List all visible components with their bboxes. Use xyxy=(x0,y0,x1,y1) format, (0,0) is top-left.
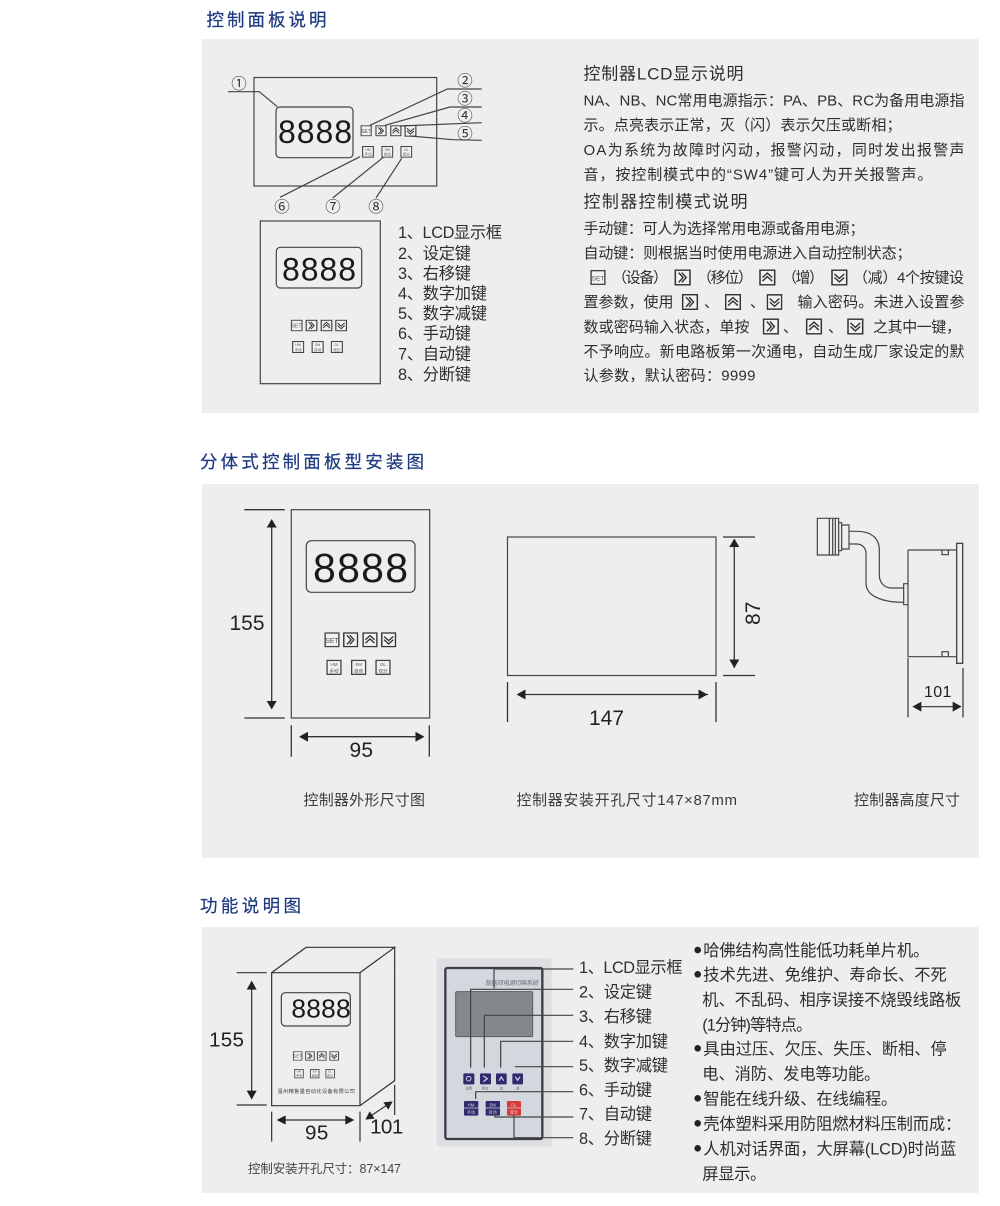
keys: DL xyxy=(328,1070,332,1074)
device casing xyxy=(437,958,552,1147)
keys: 自动 xyxy=(312,1073,318,1078)
device title: 智能双电源切换系统 xyxy=(485,979,540,987)
front plate xyxy=(957,543,963,663)
key legend list: 1、LCD显示框 xyxy=(398,224,502,242)
LCD screen xyxy=(456,992,533,1037)
text block: control mode description: 、 xyxy=(750,294,765,311)
photo key legend xyxy=(579,959,682,1148)
keys: lower row: 双分 xyxy=(403,152,410,157)
text block: LCD description: OA为系统为故障时闪动，报警闪动，同时发出报警声 xyxy=(584,141,964,159)
navy keys: DL xyxy=(511,1103,517,1108)
dimension: width 95: 95 xyxy=(350,739,373,762)
text block: control mode description: 之其中一键， xyxy=(873,319,961,336)
navy keys: 减 xyxy=(516,1085,520,1090)
navy keys: 加 xyxy=(500,1085,504,1090)
feature list: 具由过压、欠压、失压、断相、停 xyxy=(703,1040,947,1058)
text block: control mode description: SET xyxy=(592,276,604,282)
feature list: 电、消防、发电等功能。 xyxy=(702,1065,880,1083)
diagram: vertical panel: 8888 xyxy=(282,252,356,288)
keys xyxy=(325,633,396,674)
feature list: (1分钟)等特点。 xyxy=(702,1016,812,1034)
key legend list: 6、手动键 xyxy=(398,325,471,343)
dark frame xyxy=(445,968,542,1139)
text block: LCD description: NA、NB、NC常用电源指示：PA、PB、RC为备用电源指 xyxy=(584,92,964,110)
keys: 手动 xyxy=(329,668,339,674)
callout numbers: ⑧ xyxy=(368,198,384,216)
callout numbers: ③ xyxy=(457,90,473,108)
dimension: 101: 101 xyxy=(370,1116,403,1139)
key legend list: 5、数字减键 xyxy=(398,305,487,323)
navy keys: HM xyxy=(468,1103,475,1108)
diagram: vertical panel: DL xyxy=(334,343,339,347)
diagram: vertical panel: 自动 xyxy=(314,347,322,352)
dimension: depth 101: 101 xyxy=(924,684,951,701)
dimension: 95: 95 xyxy=(305,1121,328,1144)
text block: control mode description: 输入密码。未进入设置参 xyxy=(798,294,964,311)
text block: LCD description xyxy=(584,64,964,184)
feature list: 智能在线升级、在线编程。 xyxy=(703,1090,897,1108)
text block: control mode description: 置参数，使用 xyxy=(584,294,674,311)
feature list: 人机对话界面，大屏幕(LCD)时尚蓝 xyxy=(703,1140,956,1158)
keys: upper row xyxy=(361,125,416,136)
key legend list xyxy=(398,224,502,384)
keys: SM xyxy=(312,1070,317,1074)
diagram: product photo with labelled keys xyxy=(437,958,573,1147)
photo key legend: 1、LCD显示框 xyxy=(579,959,682,977)
key legend list: 7、自动键 xyxy=(398,346,471,364)
text block: control mode description: 不予响应。新电路板第一次通电，自动生成厂家设定的默 xyxy=(584,342,964,360)
dimension: width 95 xyxy=(291,725,429,762)
photo key legend: 8、分断键 xyxy=(579,1130,652,1148)
panel: installation drawings xyxy=(202,484,979,858)
feature list: 屏显示。 xyxy=(702,1165,766,1183)
keys: DL xyxy=(380,662,386,667)
keys: lower row: 手动 xyxy=(364,152,372,157)
photo key legend: 2、设定键 xyxy=(579,984,652,1002)
dimension: 101 xyxy=(365,1085,403,1139)
text block: control mode description: 认参数，默认密码：9999 xyxy=(584,368,756,384)
photo key legend: 3、右移键 xyxy=(579,1008,652,1026)
photo key legend: 6、手动键 xyxy=(579,1082,652,1100)
feature list xyxy=(694,942,961,1183)
diagram: vertical panel: 手动 xyxy=(295,347,302,352)
keys: SET xyxy=(293,1054,302,1059)
connector xyxy=(817,518,849,555)
caption: cutout dimensions: 控制安装开孔尺寸：87×147 xyxy=(248,1161,401,1176)
caption: outline size: 控制器外形尺寸图 xyxy=(304,792,425,809)
diagram: vertical panel: 双分 xyxy=(333,347,341,352)
text block: control mode description: 、 xyxy=(828,319,843,336)
dimension label: 147: 147 xyxy=(589,707,624,730)
leader lines xyxy=(228,89,482,198)
diagram: vertical panel: HM xyxy=(295,343,301,347)
leader lines xyxy=(471,969,573,1138)
text block: control mode description xyxy=(584,192,964,384)
navy keys: 双分 xyxy=(510,1109,518,1115)
LCD display frame xyxy=(276,107,353,158)
keys: lower row: DL xyxy=(404,148,409,152)
text block: control mode description: （增） xyxy=(782,270,824,286)
panel: control panel description xyxy=(202,39,979,413)
navy keys xyxy=(463,1073,523,1116)
callout numbers: ⑥ xyxy=(274,198,290,216)
keys: 双分 xyxy=(327,1073,333,1078)
navy keys: 手动 xyxy=(467,1109,475,1115)
text block: LCD description: 控制器LCD显示说明 xyxy=(584,64,744,84)
diagram: vertical panel xyxy=(260,221,380,384)
text block: control mode description: 、 xyxy=(783,319,798,336)
keys: lower row: HM xyxy=(365,148,371,152)
key legend list: 8、分断键 xyxy=(398,366,471,384)
key legend list: 4、数字加键 xyxy=(398,285,487,303)
caption: cutout size: 控制器安装开孔尺寸147×87mm xyxy=(516,792,737,809)
keys: 手动 xyxy=(296,1073,302,1078)
text block: control mode description: （移位） xyxy=(697,270,753,286)
photo key legend: 5、数字减键 xyxy=(579,1057,668,1075)
dimension: height 155: 155 xyxy=(230,612,264,635)
diagram: labelled panel front xyxy=(228,72,482,216)
diagram: vertical panel: SM xyxy=(315,343,320,347)
keys: lower row: 自动 xyxy=(384,152,391,157)
feature list: 技术先进、免维护、寿命长、不死 xyxy=(703,966,947,984)
keys: HM xyxy=(297,1070,302,1074)
keys: SM xyxy=(355,662,362,667)
keys: SET xyxy=(325,638,340,645)
key legend list: 3、右移键 xyxy=(398,265,471,283)
callout numbers: ① xyxy=(231,75,247,93)
dimension: 155 xyxy=(209,973,267,1105)
diagram: controller outline dimensions xyxy=(230,510,430,762)
navy keys: 自动 xyxy=(489,1109,497,1115)
panel: function description xyxy=(202,927,979,1193)
navy keys: 设置 xyxy=(465,1085,473,1090)
text block: control mode description: 手动键：可人为选择常用电源或备用电源； xyxy=(584,220,864,238)
callout numbers: ④ xyxy=(457,107,473,125)
callout numbers: ⑤ xyxy=(457,125,473,143)
text block: control mode description: 数或密码输入状态，单按 xyxy=(584,319,750,336)
housing xyxy=(904,550,957,657)
text block: control mode description: （设备） xyxy=(612,270,668,286)
diagram: vertical panel: SET xyxy=(292,324,302,330)
navy keys: 移位 xyxy=(482,1085,489,1090)
text block: control mode description: 控制器控制模式说明 xyxy=(584,192,748,212)
text block: control mode description: 自动键：则根据当时使用电源进入自动控制状态； xyxy=(584,245,912,262)
feature list: 机、不乱码、相序误接不烧毁线路板 xyxy=(702,991,961,1009)
diagram: controller side view and height xyxy=(817,518,963,717)
photo key legend: 7、自动键 xyxy=(579,1106,652,1124)
heading: control panel description: 控制面板说明 xyxy=(206,10,326,30)
text block: LCD description: 示。点亮表示正常，灭（闪）表示欠压或断相； xyxy=(584,117,902,134)
dimension: depth 101 xyxy=(908,658,963,717)
dimension: 95 xyxy=(272,1112,360,1144)
photo key legend: 4、数字加键 xyxy=(579,1033,668,1051)
panel outline xyxy=(254,78,437,186)
company name: 温州精鲁量自动化设备有限公司 xyxy=(277,1087,355,1095)
caption: height size: 控制器高度尺寸 xyxy=(854,792,960,809)
LCD display frame: 8888 xyxy=(278,114,352,150)
text block: control mode description: 、 xyxy=(704,294,719,311)
keys: 自动 xyxy=(354,668,364,674)
key legend list: 2、设定键 xyxy=(398,245,471,263)
text block: LCD description: 音，按控制模式中的“SW4”键可人为开关报警声。 xyxy=(584,166,932,184)
keys: upper row: SET xyxy=(361,129,371,135)
callout numbers: ② xyxy=(457,72,473,90)
LCD display: 8888 xyxy=(313,545,408,591)
feature list: 壳体塑料采用防阻燃材料压制而成： xyxy=(703,1115,961,1133)
dimension label: 87: 87 xyxy=(742,602,765,625)
dimension: height 155 xyxy=(230,510,285,718)
diagram: mounting cutout xyxy=(508,537,765,730)
feature list: 哈佛结构高性能低功耗单片机。 xyxy=(703,942,929,960)
keys: lower row xyxy=(363,146,412,157)
text block: control mode description: （减）4个按键设 xyxy=(853,270,964,286)
heading: function description: 功能说明图 xyxy=(200,896,301,916)
dimension: 155: 155 xyxy=(209,1029,244,1052)
navy keys: SM xyxy=(489,1103,496,1108)
keys xyxy=(293,1052,338,1078)
keys: 双分 xyxy=(378,668,388,674)
keys: HM xyxy=(330,662,338,667)
cable xyxy=(849,531,903,602)
heading: split panel installation: 分体式控制面板型安装图 xyxy=(200,452,424,472)
LCD display: 8888 xyxy=(291,994,351,1024)
keys: lower row: SM xyxy=(385,148,390,152)
box body xyxy=(272,947,395,1106)
callout numbers xyxy=(231,72,473,216)
diagram: controller 3D view xyxy=(209,947,403,1144)
callout numbers: ⑦ xyxy=(325,198,341,216)
